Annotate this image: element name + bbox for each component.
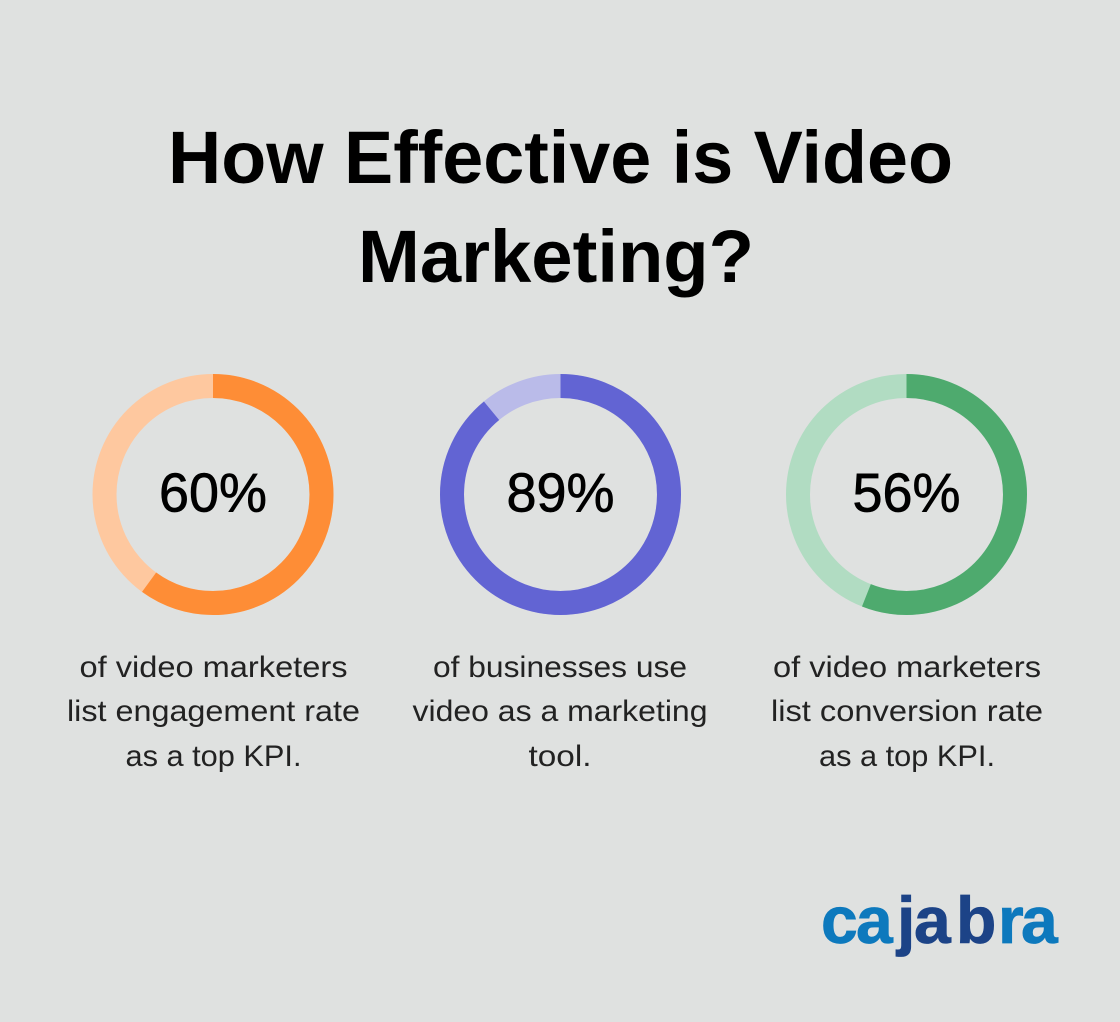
description [771, 651, 1043, 773]
stat: 60%: 60% [159, 462, 267, 524]
panel: 89% businesses [412, 386, 708, 773]
donut chart: 56% [798, 386, 1015, 603]
description: of businesses use [433, 651, 687, 684]
description [67, 651, 360, 773]
description: list engagement rate [67, 695, 360, 728]
description [412, 651, 708, 773]
description: of video marketers [773, 651, 1041, 684]
description: as a top KPI. [126, 740, 302, 773]
donut chart: 60% [104, 386, 322, 603]
title: Marketing? [358, 215, 754, 298]
stat: 56%: 56% [852, 462, 960, 524]
description: list conversion rate [771, 695, 1043, 728]
stat: 89%: 89% [506, 462, 614, 524]
panel: 56% conversion rate [771, 386, 1043, 773]
panel: 60% engagement rate [67, 386, 360, 773]
description: as a top KPI. [819, 740, 995, 773]
donut chart: 89% [452, 386, 669, 603]
logo: cajabra: cajabra [821, 883, 1059, 957]
description: tool. [528, 740, 592, 773]
title [168, 116, 953, 298]
description: video as a marketing [412, 695, 708, 728]
description: of video marketers [80, 651, 348, 684]
title: How Effective is Video [168, 116, 953, 199]
